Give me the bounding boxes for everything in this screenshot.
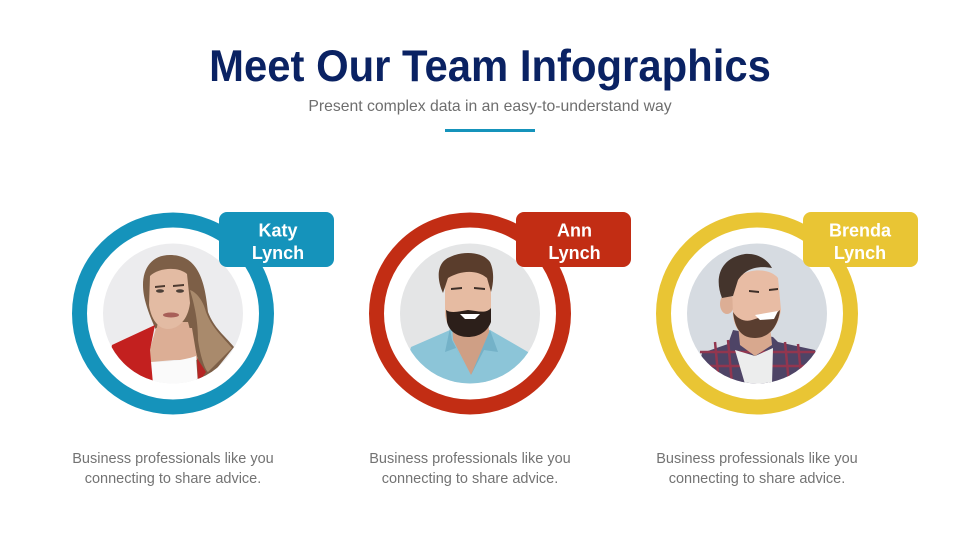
ring: yellow bbox=[664, 220, 850, 407]
description: Ann: Business professionals like you bbox=[369, 451, 571, 467]
name badge bbox=[803, 212, 918, 267]
description: Ann: connecting to share advice. bbox=[382, 471, 558, 487]
name label: Brenda bbox=[829, 220, 892, 240]
ring: blue bbox=[80, 220, 266, 407]
description: Ann bbox=[369, 451, 571, 487]
description: Brenda bbox=[656, 451, 858, 487]
name label: Katy bbox=[258, 220, 298, 240]
name label: Ann bbox=[557, 220, 592, 240]
subtitle: Present complex data in an easy-to-understand way bbox=[308, 98, 672, 115]
panel: Katy Lynch bbox=[80, 212, 334, 407]
name label: Lynch bbox=[548, 243, 601, 263]
description: Katy bbox=[72, 451, 274, 487]
description: Brenda: Business professionals like you bbox=[656, 451, 858, 467]
name label: Lynch bbox=[834, 243, 886, 263]
ring: red bbox=[376, 220, 564, 407]
title underline bbox=[445, 129, 535, 132]
title: Meet Our Team Infographics bbox=[209, 42, 771, 91]
description: Katy: connecting to share advice. bbox=[85, 471, 261, 487]
name badge bbox=[219, 212, 334, 267]
description: Katy: Business professionals like you bbox=[72, 451, 274, 467]
portrait: smiling man in plaid shirt bbox=[687, 243, 827, 384]
panel: Brenda Lynch bbox=[664, 212, 918, 407]
description: Brenda: connecting to share advice. bbox=[669, 471, 845, 487]
portrait: bearded man in blue shirt bbox=[400, 243, 540, 384]
portrait: woman in red blazer bbox=[103, 243, 243, 384]
name badge bbox=[516, 212, 631, 267]
panel: Ann Lynch bbox=[376, 212, 631, 407]
name label: Lynch bbox=[252, 243, 304, 263]
